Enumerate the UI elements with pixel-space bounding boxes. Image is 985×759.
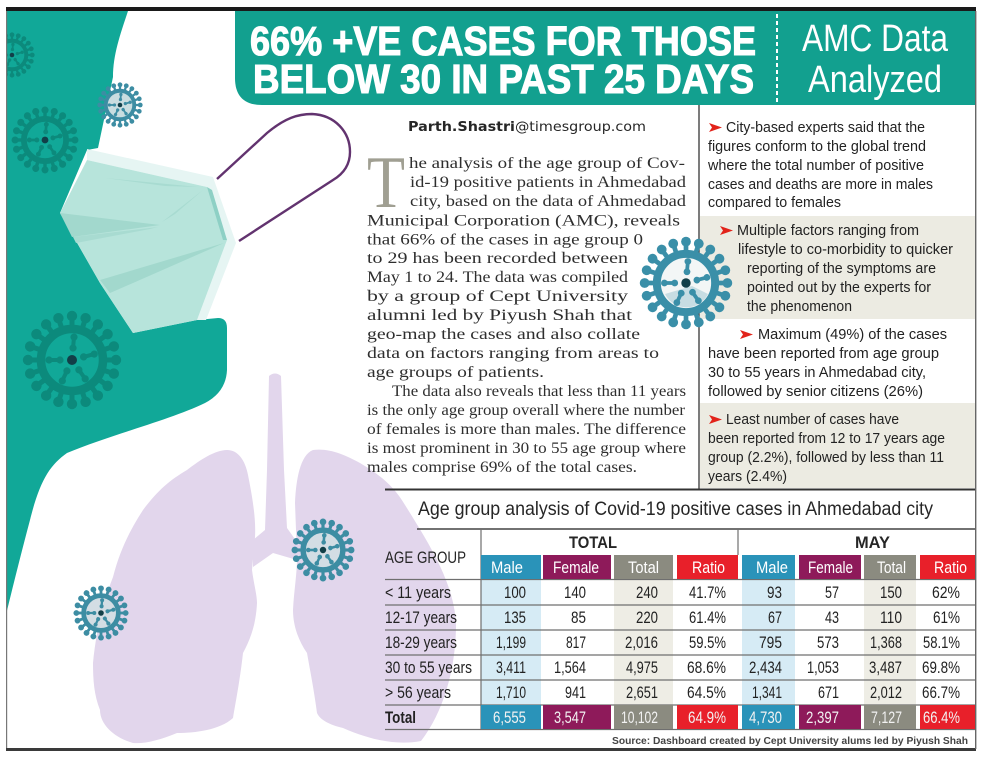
row: under 11: 240 [636, 584, 658, 602]
column header labels [491, 559, 967, 577]
column header labels: Ratio [934, 559, 967, 577]
bullet: multiple factors: lifestyle to co-morbidity to quicker [738, 242, 953, 258]
icon: large virus between columns [640, 237, 732, 329]
table stripes [481, 580, 916, 705]
article body text: Municipal Corporation (AMC), reveals [367, 212, 680, 230]
total row values: 64.9% [688, 709, 726, 727]
bullet: multiple factors: Multiple factors ranging from [737, 223, 919, 239]
article body text: males comprise 69% of the total cases. [367, 459, 637, 476]
table title: Age group analysis of Covid-19 positive cases in Ahmedabad city [418, 498, 933, 520]
row: 18-29: 1,199 [496, 634, 526, 652]
row: 18-29 [496, 634, 960, 652]
row: 18-29: 817 [566, 634, 586, 652]
icon: virus on left lung [73, 585, 129, 641]
row: over 56: 671 [818, 684, 839, 702]
source note: Source: Dashboard created by Cept University alums led by Piyush Shah [612, 735, 968, 747]
article body text: that 66% of the cases in age group 0 [367, 232, 643, 248]
row: 18-29: 2,016 [625, 634, 658, 652]
bullet: multiple factors: reporting of the symptoms are [747, 261, 936, 277]
row: over 56 [496, 684, 960, 702]
byline: Parth.Shastri @timesgroup.com [408, 119, 646, 135]
icon: virus on right lung [292, 519, 354, 581]
article body text: is the only age group overall where the number [367, 402, 686, 419]
row: 18-29: 59.5% [689, 634, 726, 652]
group headers: TOTAL [569, 533, 617, 552]
bullet: least cases: years (2.4%) [708, 469, 787, 485]
total row values: 6,555 [493, 709, 526, 727]
header side label: AMC Data [802, 18, 949, 60]
total row values: 66.4% [923, 709, 960, 727]
row: under 11: 41.7% [689, 584, 726, 602]
bullet: least cases: been reported from 12 to 17 years age [708, 431, 945, 447]
article body text: May 1 to 24. The data was compiled [367, 269, 628, 286]
headline: 66% +VE CASES FOR THOSE [250, 18, 756, 64]
column header labels: Total [877, 559, 906, 577]
article body text: id-19 positive patients in Ahmedabad [410, 174, 686, 191]
group headers: MAY [855, 533, 891, 552]
article body text: alumni led by Piyush Shah that [367, 307, 633, 324]
bullet: multiple factors [720, 223, 953, 315]
icon: virus near mask top [97, 82, 143, 128]
article body text: The data also reveals that less than 11 years [392, 383, 686, 400]
bullet: global trend: compared to females [708, 195, 841, 211]
row: over 56: 2,651 [626, 684, 658, 702]
row: 30 to 55 [496, 659, 960, 677]
article body text: age groups of patients. [367, 364, 544, 381]
row: 12-17: 85 [571, 609, 586, 627]
row: 30 to 55: 4,975 [626, 659, 658, 677]
row: over 56: 1,710 [496, 684, 526, 702]
headline [250, 18, 756, 102]
column header labels: Ratio [692, 559, 725, 577]
table grid [385, 529, 975, 730]
row: 30 to 55: 3,487 [869, 659, 902, 677]
total row values [493, 709, 960, 727]
bullet: maximum cases: 30 to 55 years in Ahmedabad city, [708, 365, 926, 381]
total row values: 10,102 [621, 709, 658, 727]
row: over 56: 1,341 [752, 684, 782, 702]
icon: large virus on teal bottom [23, 311, 121, 409]
row: 30 to 55: 68.6% [687, 659, 726, 677]
row: under 11: 140 [564, 584, 586, 602]
column header labels: Male [491, 559, 523, 577]
bullet points panel [707, 120, 953, 485]
bullet: least cases: Least number of cases have [726, 412, 899, 428]
header side label: Analyzed [808, 59, 942, 101]
table white columns over lung [541, 580, 742, 705]
bullet: global trend: City-based experts said that the [726, 120, 925, 136]
row: 12-17: 220 [636, 609, 658, 627]
row labels: 18-29 years [385, 634, 457, 652]
row: 18-29: 58.1% [923, 634, 960, 652]
row: 12-17 [504, 609, 960, 627]
row labels: 12-17 years [385, 609, 457, 627]
row: over 56: 66.7% [922, 684, 960, 702]
group headers: AGE GROUP [385, 548, 466, 567]
bullet: least cases [708, 412, 945, 485]
row: 12-17: 61% [933, 609, 960, 627]
shaded bullet backgrounds [700, 216, 975, 488]
row: over 56: 64.5% [687, 684, 726, 702]
column header labels: Male [756, 559, 788, 577]
column divider [698, 105, 700, 489]
total row values: 2,397 [806, 709, 839, 727]
row: 30 to 55: 1,053 [807, 659, 839, 677]
row: under 11: 62% [932, 584, 960, 602]
row: 30 to 55: 2,434 [749, 659, 782, 677]
total row values: 7,127 [871, 709, 902, 727]
row: under 11: 150 [880, 584, 902, 602]
article body text: data on factors ranging from areas to [367, 345, 659, 362]
column header labels: Female [808, 559, 853, 577]
row: 30 to 55: 3,411 [496, 659, 526, 677]
bullet: maximum cases: Maximum (49%) of the cases [758, 327, 947, 343]
row: under 11: 100 [504, 584, 526, 602]
bullet: maximum cases: have been reported from age group [708, 346, 939, 362]
row labels: 30 to 55 years [385, 659, 472, 677]
row: 30 to 55: 1,564 [554, 659, 586, 677]
bullet: global trend: where the total number of positive [707, 158, 924, 174]
header side label [802, 18, 949, 101]
row: 12-17: 135 [504, 609, 526, 627]
row: 18-29: 573 [817, 634, 839, 652]
row labels [385, 584, 472, 727]
row labels: Total [385, 709, 416, 727]
row: over 56: 2,012 [870, 684, 902, 702]
row: 12-17: 67 [768, 609, 782, 627]
row: 30 to 55: 69.8% [922, 659, 960, 677]
bullet: maximum cases: followed by senior citizens (26%) [708, 384, 923, 400]
article body text: of females is more than males. The difference [367, 421, 686, 438]
row: 18-29: 795 [759, 634, 782, 652]
total row values: 4,730 [749, 709, 782, 727]
table section rule [385, 488, 975, 490]
row: 18-29: 1,368 [870, 634, 902, 652]
total row cells [481, 705, 975, 729]
row labels: < 11 years [385, 584, 451, 602]
article body text: he analysis of the age group of Cov- [409, 155, 685, 172]
bullet: maximum cases [708, 327, 947, 400]
bullet: multiple factors: pointed out by the experts for [747, 280, 931, 296]
row: 12-17: 43 [825, 609, 839, 627]
article body text: geo-map the cases and also collate [367, 326, 640, 343]
headline: BELOW 30 IN PAST 25 DAYS [253, 56, 754, 102]
article body text: city, based on the data of Ahmedabad [410, 193, 686, 210]
row: under 11 [504, 584, 960, 602]
row labels: > 56 years [385, 684, 451, 702]
column header cells [481, 555, 975, 579]
row: under 11: 57 [825, 584, 839, 602]
row: 12-17: 61.4% [689, 609, 726, 627]
data table [385, 529, 975, 730]
bullet: multiple factors: the phenomenon [747, 299, 852, 315]
row: over 56: 941 [565, 684, 586, 702]
group headers [385, 533, 891, 567]
article body text: to 29 has been recorded between [367, 250, 628, 267]
header banner [235, 11, 975, 105]
bullet: least cases: group (2.2%), followed by less than 11 [708, 450, 944, 466]
drop cap: T [367, 142, 405, 224]
article body text: by a group of Cept University [367, 288, 628, 305]
bullet: global trend [707, 120, 933, 211]
column header labels: Total [628, 559, 659, 577]
bullet: global trend: figures conform to the global trend [708, 139, 926, 155]
icon: virus top left [0, 32, 35, 78]
article body text [367, 155, 686, 476]
illustration: lungs [93, 374, 456, 743]
column header labels: Female [553, 559, 599, 577]
dashed separator [776, 14, 778, 104]
article body text: is most prominent in 30 to 55 age group where [367, 440, 686, 457]
illustration: teal face silhouette [6, 11, 227, 615]
bullet: global trend: cases and deaths are more in males [708, 177, 933, 193]
row: 12-17: 110 [880, 609, 902, 627]
row: under 11: 93 [767, 584, 782, 602]
icon: mask ear strap [217, 114, 350, 241]
total row values: 3,547 [554, 709, 586, 727]
icon: virus on teal middle [12, 107, 78, 173]
icon: face mask [60, 149, 236, 333]
